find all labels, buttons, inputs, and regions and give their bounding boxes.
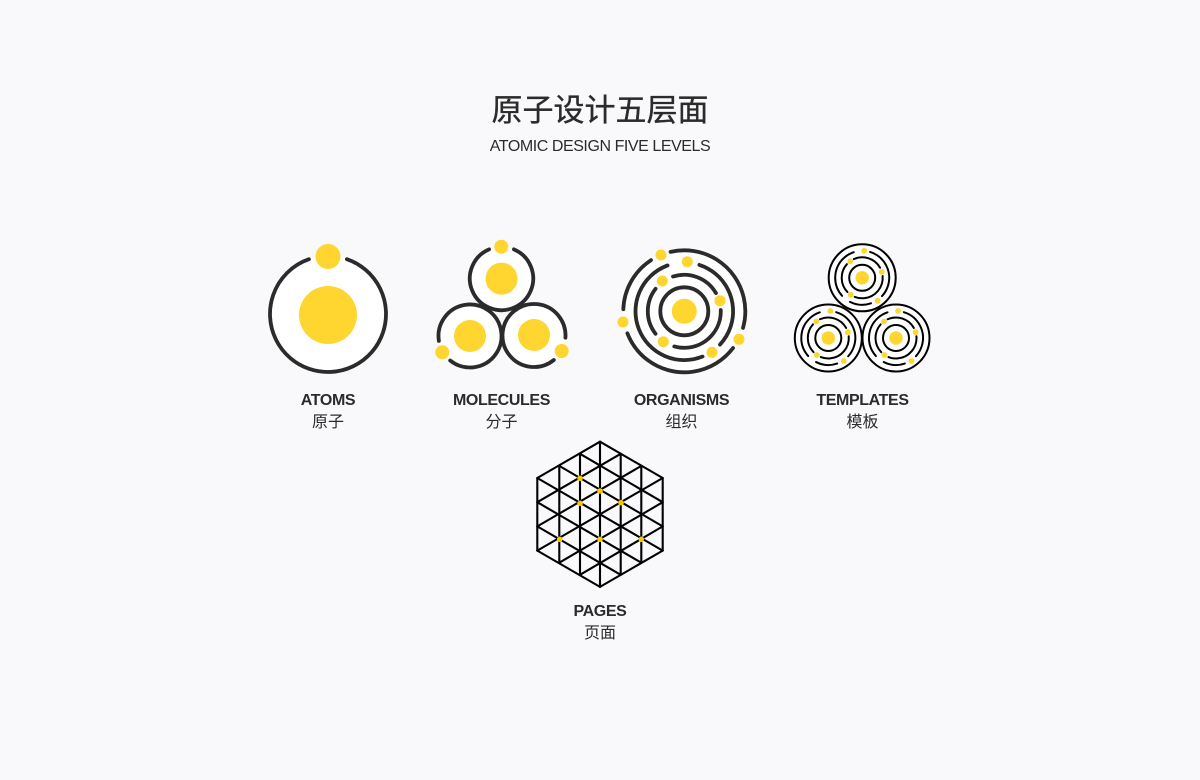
label: molecules: 分子 [485,413,518,431]
icon: molecules [434,237,578,380]
label: atoms: 原子 [312,413,344,431]
icon: atoms [254,240,402,388]
label: templates [816,392,909,431]
title: 原子设计五层面 [492,93,708,128]
subtitle: ATOMIC DESIGN FIVE LEVELS [490,138,710,155]
label: molecules [453,392,551,431]
icon: pages hexagon grid [537,442,663,587]
label: molecules: MOLECULES [453,392,551,409]
icon: templates [790,240,934,376]
icon: organisms [599,226,770,397]
label: atoms: ATOMS [301,392,356,409]
label: organisms: ORGANISMS [634,392,730,409]
label: pages [574,603,627,642]
label: templates: 模板 [846,413,879,431]
label: pages: PAGES [574,603,627,620]
label: organisms: 组织 [665,413,698,431]
label: organisms [634,392,730,431]
label: templates: TEMPLATES [816,392,909,409]
label: atoms [301,392,356,431]
label: pages: 页面 [584,625,616,642]
